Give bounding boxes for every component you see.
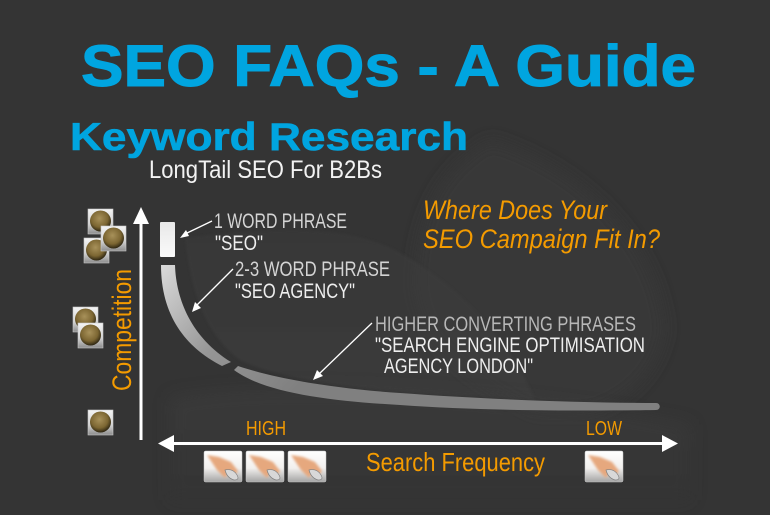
- x axis arrow: [158, 435, 678, 452]
- y axis arrow: [133, 207, 149, 440]
- label: 2-3 word phrase: "SEO AGENCY": [235, 280, 355, 303]
- label: higher converting phrases: AGENCY LONDON": [384, 355, 533, 378]
- arrow: to middle: [192, 269, 233, 312]
- callout question: SEO Campaign Fit In?: [423, 224, 660, 254]
- label: higher converting phrases: "SEARCH ENGINE OPTIMISATION: [375, 334, 645, 357]
- x axis label: Search Frequency: [366, 447, 545, 477]
- label: 1 word phrase: 1 WORD PHRASE: [214, 210, 347, 233]
- curve segment: head: [160, 222, 175, 257]
- label: higher converting phrases: [375, 313, 645, 378]
- subheading: LongTail SEO For B2Bs: [149, 156, 382, 184]
- label: 1 word phrase: [214, 210, 347, 255]
- curve segment: middle: [161, 265, 231, 366]
- icon: low competition coin: [88, 410, 113, 435]
- icons: high frequency hands: [204, 451, 326, 482]
- label: high: HIGH: [246, 418, 286, 440]
- background shapes: [170, 140, 690, 500]
- label: low: LOW: [586, 418, 622, 440]
- label: 2-3 word phrase: [235, 258, 390, 303]
- icon: low frequency hand: [585, 451, 623, 482]
- label: higher converting phrases: HIGHER CONVERTING PHRASES: [375, 313, 636, 336]
- callout question: [423, 195, 660, 254]
- title: SEO FAQs - A Guide: [81, 34, 696, 99]
- label: 2-3 word phrase: 2-3 WORD PHRASE: [235, 258, 390, 281]
- icons: medium competition coins: [73, 307, 103, 348]
- heading: Keyword Research: Keyword Research: [70, 116, 468, 159]
- icons: high competition coins: [84, 209, 126, 263]
- arrow: to long tail: [313, 323, 372, 380]
- arrow: to head: [180, 221, 212, 238]
- callout question: Where Does Your: [423, 195, 608, 225]
- curve segment: long tail: [234, 366, 660, 410]
- label: 1 word phrase: "SEO": [215, 232, 263, 255]
- y axis label: Competition: [107, 269, 137, 391]
